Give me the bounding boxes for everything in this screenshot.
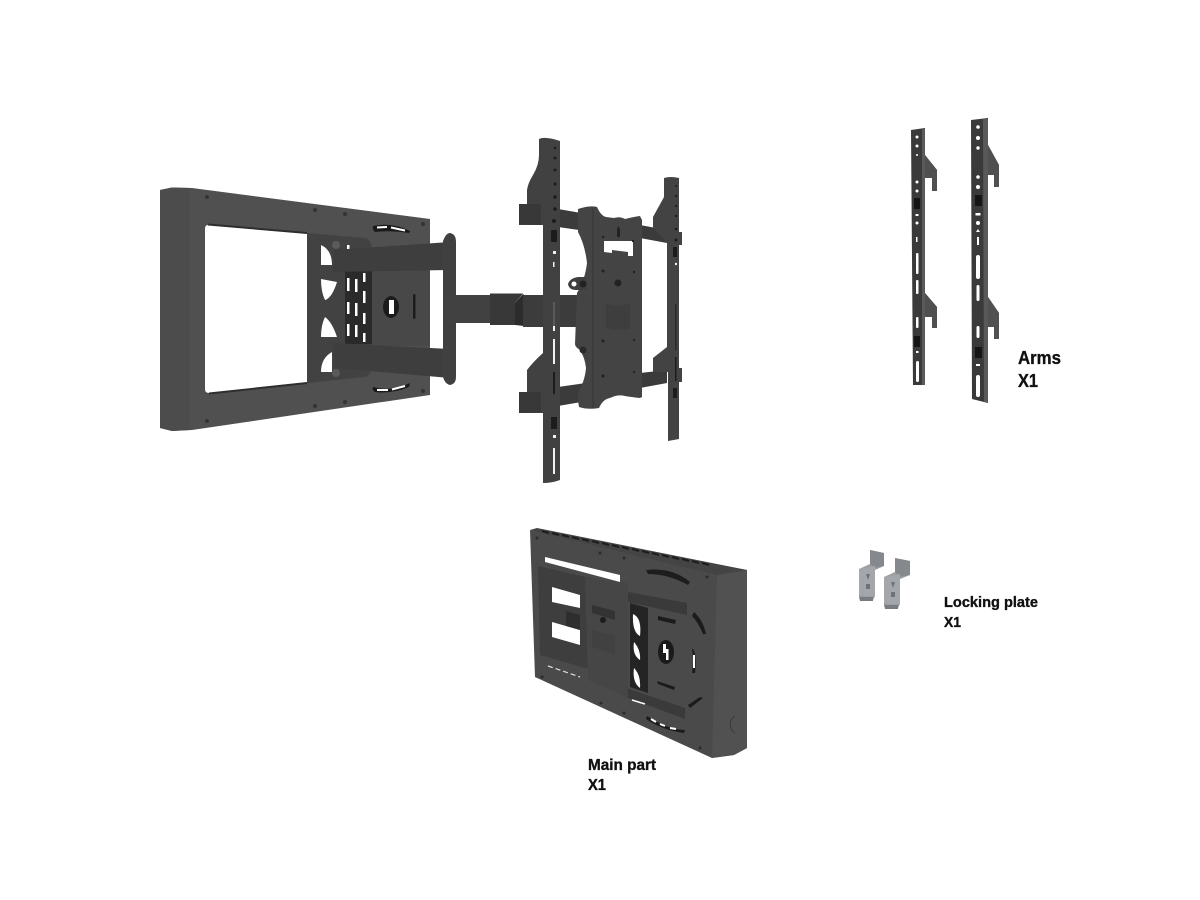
housing — [530, 528, 747, 758]
articulating arms — [333, 233, 580, 385]
main part label: Main part — [588, 757, 657, 774]
left vertical rail — [519, 138, 560, 483]
locking plate label — [944, 594, 1038, 631]
main part label: X1 — [588, 777, 606, 794]
main part label — [588, 757, 657, 794]
short rail — [911, 128, 937, 385]
locking plate right — [884, 558, 910, 609]
arms: two rails — [911, 118, 999, 403]
main part — [530, 528, 747, 758]
arms label — [1018, 348, 1061, 391]
wall frame — [160, 188, 430, 431]
arms label: Arms — [1018, 348, 1061, 368]
locking plate label: Locking plate — [944, 594, 1038, 611]
arms label: X1 — [1018, 371, 1038, 391]
swivel bracket — [307, 233, 373, 383]
long rail — [971, 118, 999, 403]
cross bars — [558, 209, 667, 406]
locking plate label: X1 — [944, 614, 961, 631]
mounting plate with centre hole — [372, 268, 430, 346]
assembled wall mount — [160, 138, 682, 483]
locking plates — [859, 550, 910, 609]
VESA centre plate — [568, 206, 642, 409]
locking plate left — [859, 550, 884, 601]
right vertical rail — [653, 177, 682, 441]
cutouts and swivel plate — [538, 557, 706, 733]
